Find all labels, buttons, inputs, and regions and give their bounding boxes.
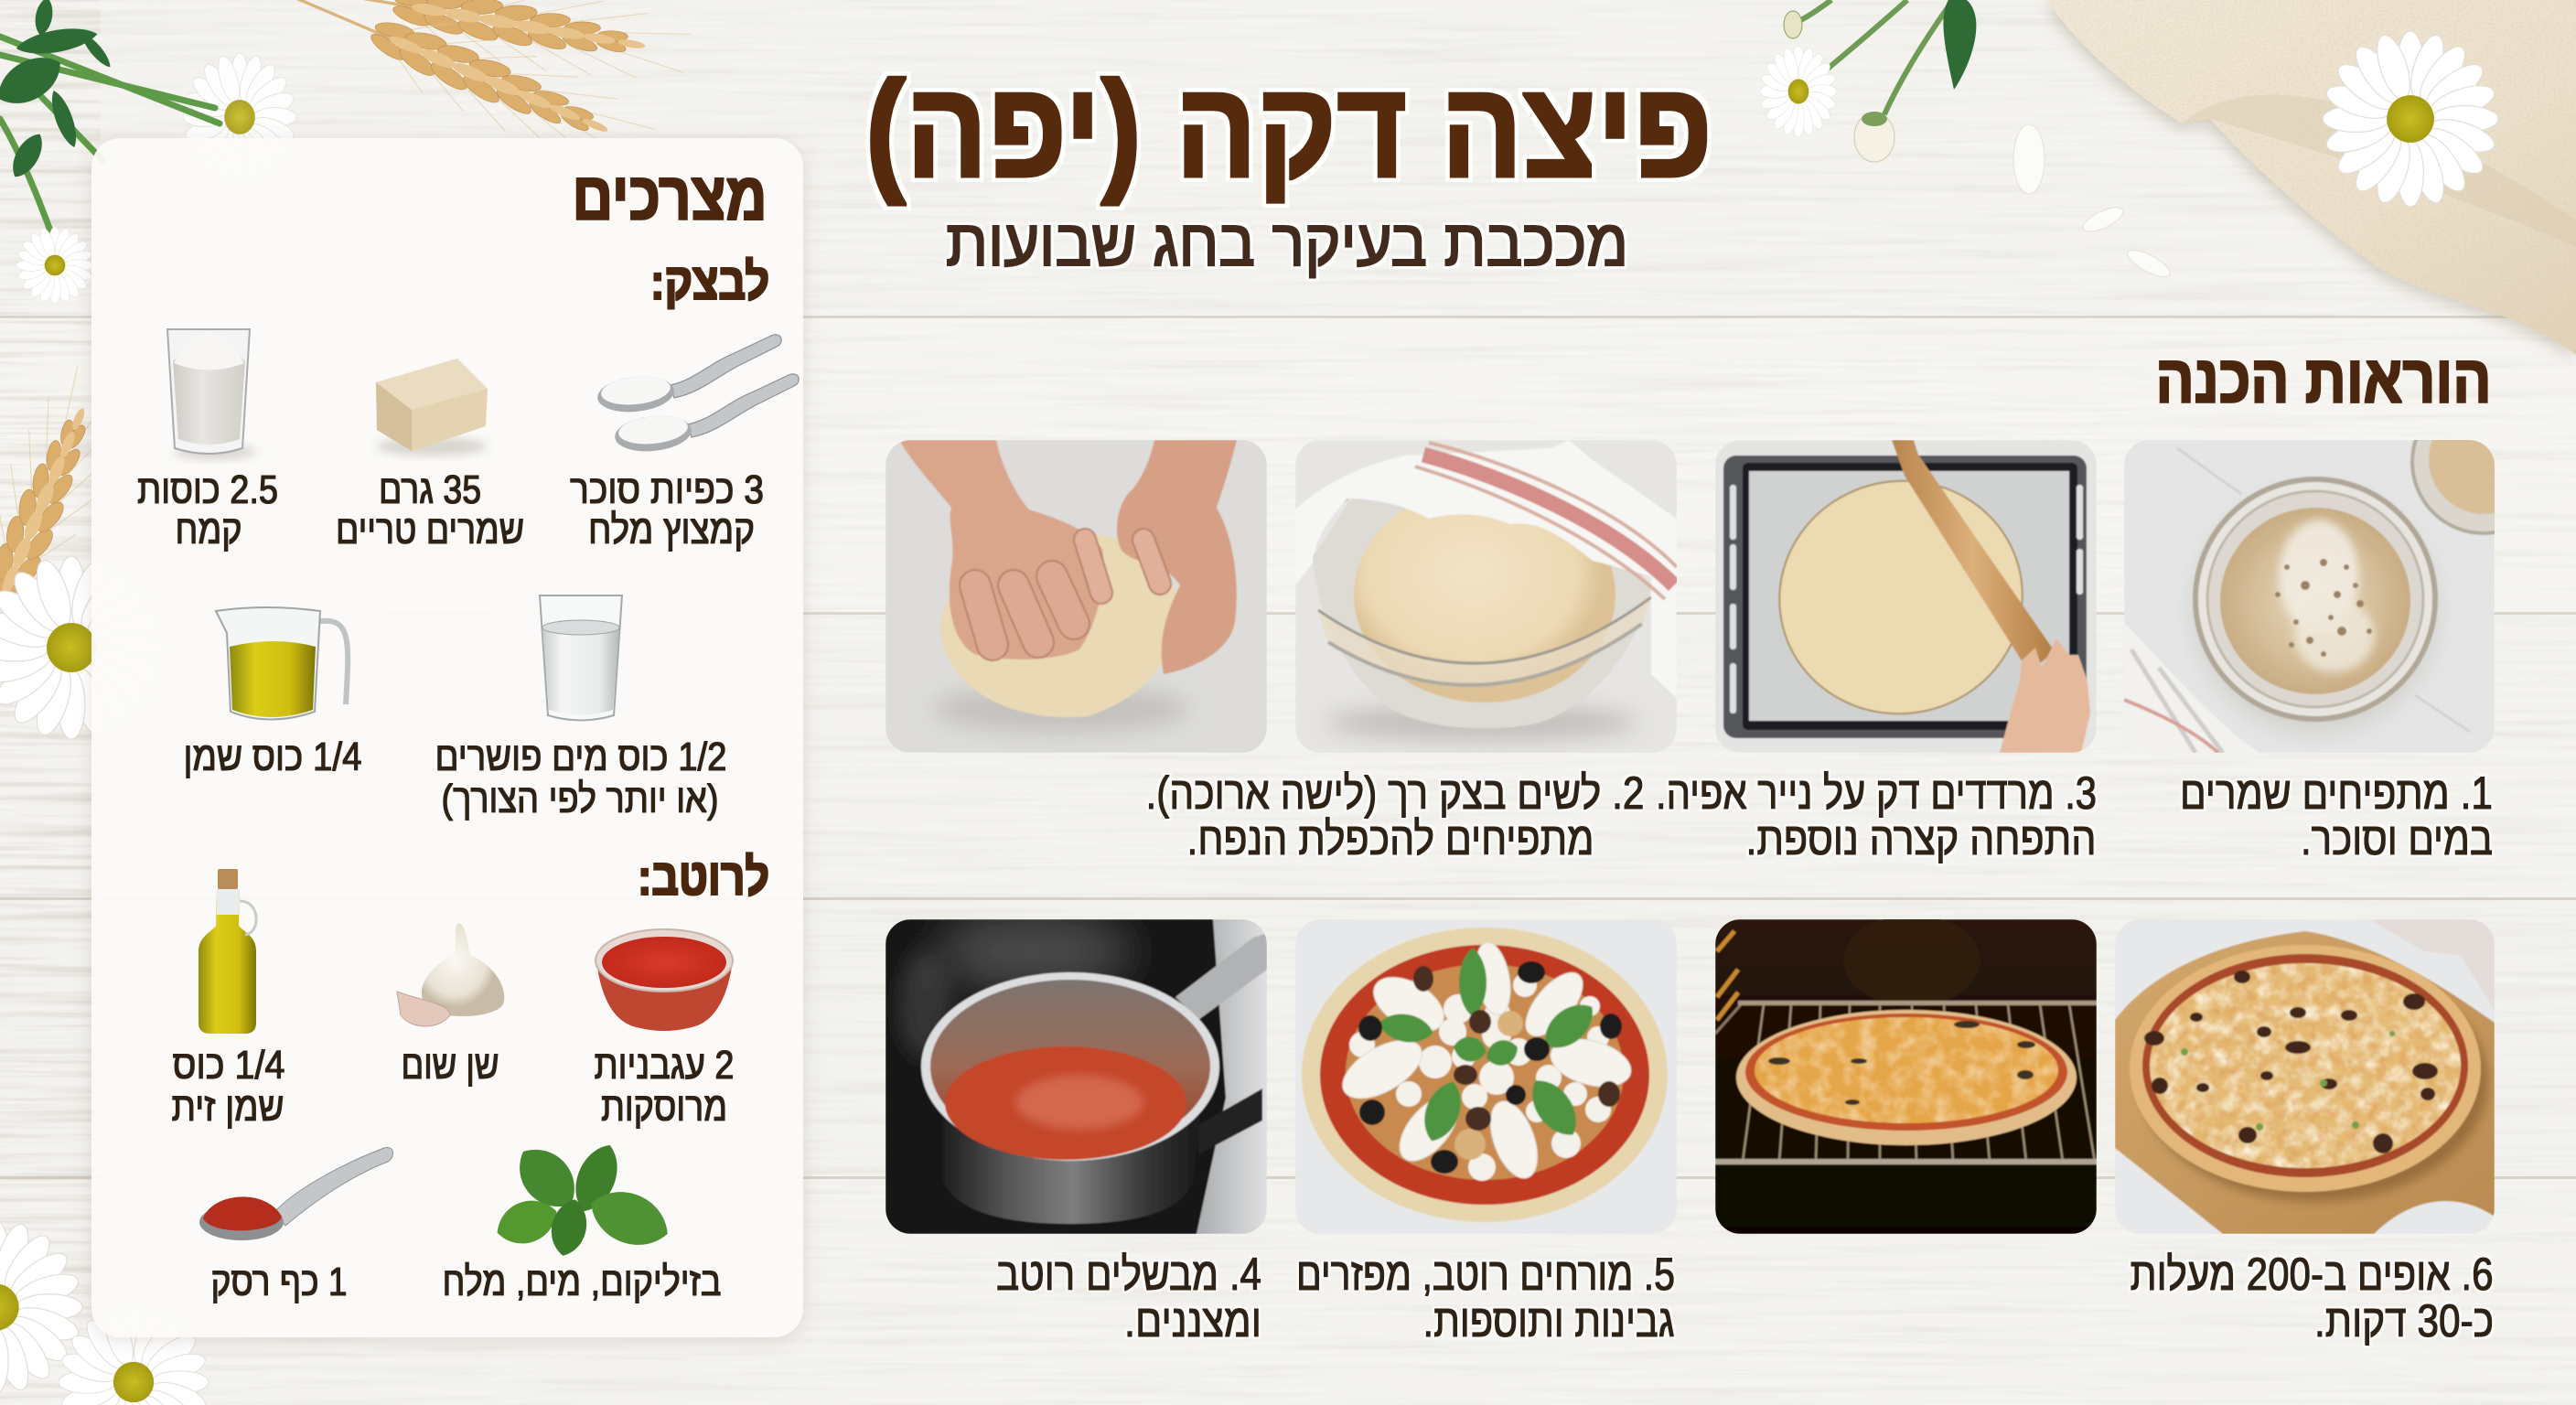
- caption: step 5: [1296, 1249, 1675, 1346]
- label: yeast: [336, 467, 524, 552]
- label: garlic: שן שום: [401, 1043, 499, 1088]
- title: פיצה דקה (יפה): [865, 52, 1712, 206]
- step 1 photo: yeast in bowl: [2124, 440, 2495, 753]
- label: olive oil: [172, 1043, 285, 1130]
- caption: step 1: במים וסוכר.: [2301, 813, 2493, 864]
- icon: garlic: [397, 924, 504, 1026]
- label: water: (או יותר לפי הצורך): [441, 777, 719, 821]
- wheat and flowers, top-left corner: [0, 0, 694, 304]
- step 4 photo: pizza with toppings before baking: [1295, 919, 1677, 1234]
- caption: step 6: [2130, 1249, 2494, 1346]
- subheading: for sauce: לרוטב:: [638, 848, 769, 906]
- caption: step 4: 4. מבשלים רוטב: [996, 1249, 1261, 1300]
- step 6 photo: baked pizza on board: [2115, 919, 2495, 1234]
- panel: ingredients: [91, 138, 803, 1337]
- label: tomatoes: [595, 1043, 734, 1130]
- subtitle: מככבת בעיקר בחג שבועות: [946, 207, 1628, 280]
- caption: step 1: [2180, 767, 2493, 864]
- wheat ear, left edge: [0, 358, 138, 807]
- label: yeast: 35 גרם: [379, 467, 481, 512]
- caption: step 2: מתפיחים להכפלת הנפח.: [1187, 813, 1594, 864]
- caption: step 6: כ-30 דקות.: [2314, 1295, 2494, 1346]
- label: tomatoes: מרוסקות: [601, 1085, 727, 1130]
- icon: measuring cup with oil: [216, 607, 348, 719]
- icon: spoon of tomato paste: [199, 1148, 393, 1240]
- heading: ingredients: מצרכים: [573, 158, 767, 234]
- icon: crushed tomatoes bowl: [596, 929, 733, 1031]
- step 4 photo: sauce simmering in pot: [886, 910, 1267, 1234]
- caption: step 3: 3. מרדדים דק על נייר אפיה.: [1656, 767, 2097, 819]
- daisies, left edge: [0, 556, 209, 1405]
- step 2 photo: dough rising under towel: [1295, 440, 1677, 753]
- label: sugar and salt: קמצוץ מלח: [588, 508, 755, 552]
- icon: glass of water: [540, 595, 622, 721]
- icon: glass of flour: [167, 329, 256, 459]
- label: olive oil: 1/4 כוס: [172, 1043, 285, 1088]
- caption: step 2: 2. לשים בצק רך (לישה ארוכה).: [1145, 767, 1645, 819]
- step 2 photo: kneading dough: [886, 440, 1267, 753]
- step 3 photo: rolling dough on tray: [1715, 440, 2097, 753]
- label: flour: [137, 467, 278, 552]
- caption: step 4: ומצננים.: [1124, 1295, 1261, 1346]
- icon: olive oil bottle: [199, 869, 256, 1034]
- label: tomato paste: 1 כף רסק: [210, 1260, 348, 1304]
- flowers and petals, top centre-right: [1760, 0, 2174, 282]
- label: sugar and salt: 3 כפיות סוכר: [570, 467, 764, 512]
- caption: step 5: 5. מורחים רוטב, מפזרים: [1296, 1249, 1675, 1300]
- heading: instructions: הוראות הכנה: [2155, 341, 2492, 417]
- label: flour: קמח: [176, 508, 242, 552]
- icon: sugar and salt spoons: [596, 335, 799, 455]
- caption: step 2: [1145, 767, 1645, 864]
- caption: step 6: 6. אופים ב-200 מעלות: [2130, 1249, 2494, 1300]
- caption: step 3: [1656, 767, 2097, 864]
- label: oil: 1/4 כוס שמן: [183, 735, 362, 779]
- icon: yeast block: [376, 359, 488, 456]
- label: yeast: שמרים טריים: [336, 508, 524, 552]
- caption: step 5: גבינות ותוספות.: [1423, 1295, 1674, 1346]
- label: sugar and salt: [570, 467, 764, 552]
- label: tomatoes: 2 עגבניות: [595, 1043, 734, 1088]
- label: basil, water, salt: בזיליקום, מים, מלח: [443, 1260, 721, 1304]
- label: water: [435, 735, 726, 821]
- step 5 photo: pizza on oven rack: [1715, 915, 2097, 1234]
- caption: step 4: [996, 1249, 1261, 1346]
- linen cloth with daisy, top-right corner: [2047, 0, 2576, 355]
- label: olive oil: שמן זית: [172, 1085, 284, 1130]
- caption: step 3: התפחה קצרה נוספת.: [1745, 813, 2097, 864]
- icon: basil: [490, 1136, 677, 1260]
- caption: step 1: 1. מתפיחים שמרים: [2180, 767, 2493, 819]
- subheading: for dough: לבצק:: [650, 252, 769, 310]
- label: flour: 2.5 כוסות: [137, 467, 278, 512]
- label: water: 1/2 כוס מים פושרים: [435, 735, 726, 779]
